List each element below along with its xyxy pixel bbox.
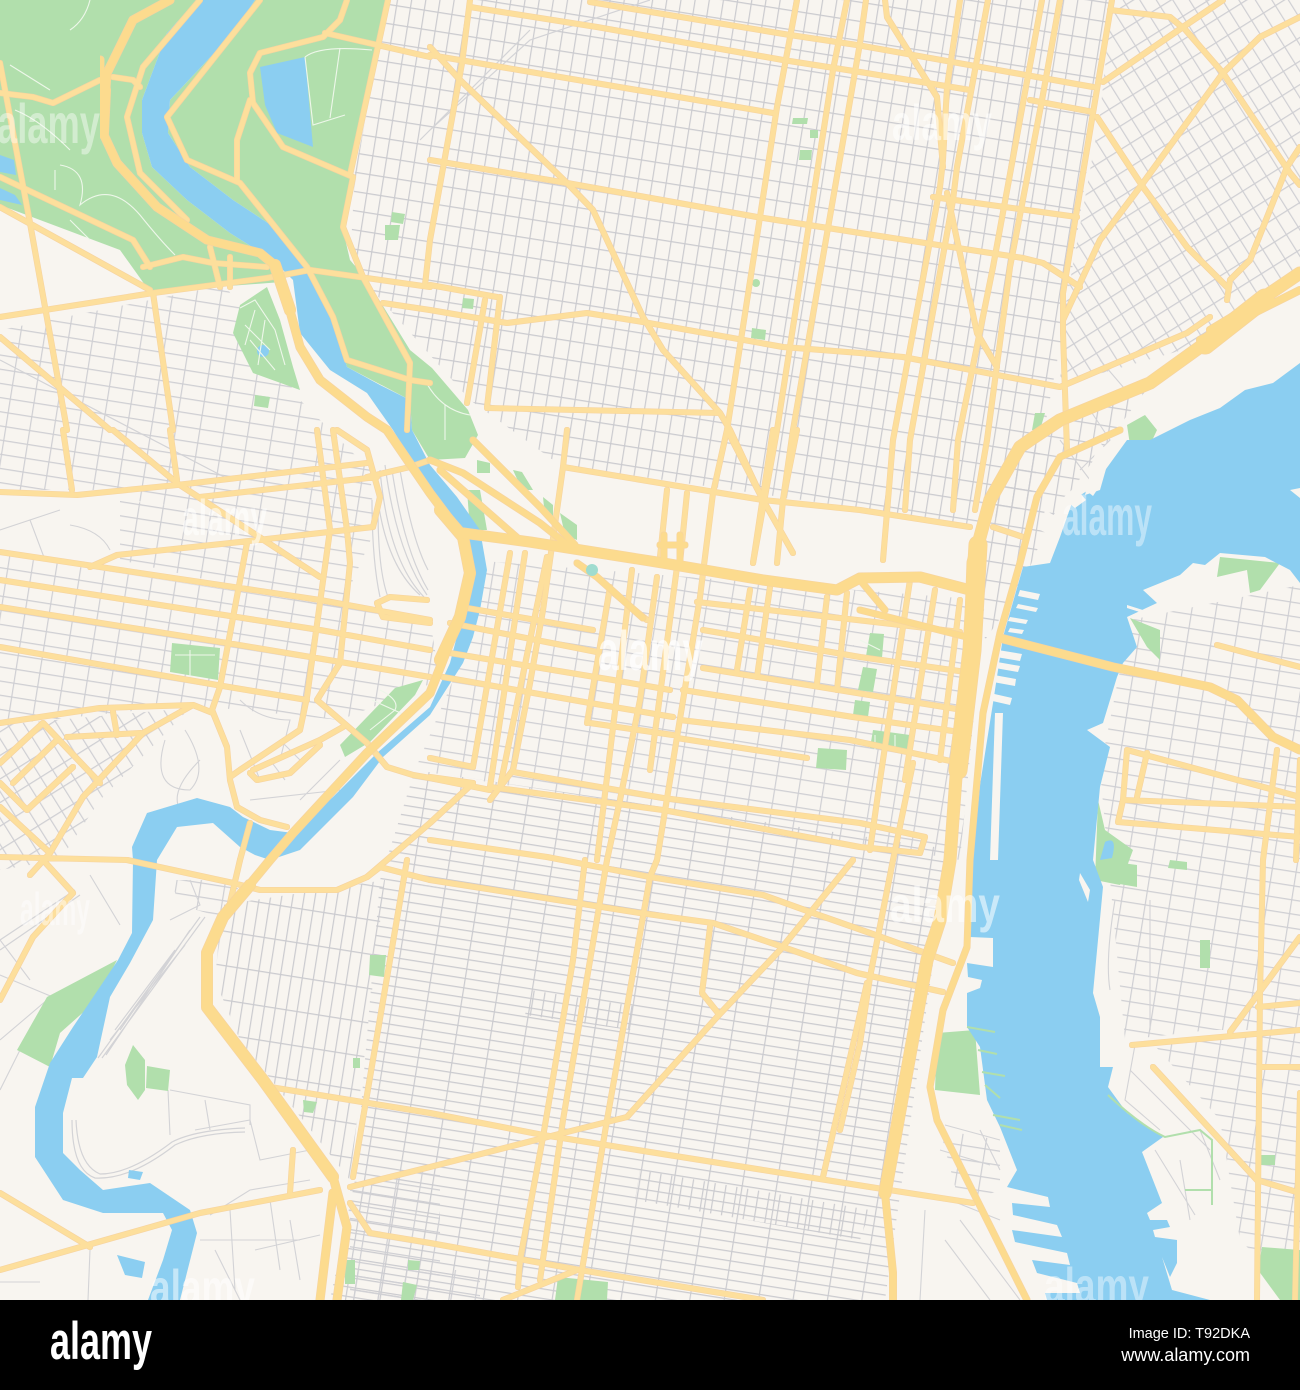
alamy logo: alamy [50,1312,152,1371]
watermarks: alamy [0,92,100,155]
watermarks: alamy [1044,1258,1149,1314]
Vine Street Expressway [463,533,970,590]
Schuylkill River [35,0,487,1300]
image id: Image ID: T92DKA [1129,1326,1250,1342]
piers and marinas [988,440,1300,902]
Delaware River [967,363,1300,1300]
waterfront greenery lines [967,1027,1212,1205]
main city streets [425,0,1210,1300]
watermarks: alamy [892,95,992,151]
rail yards [0,0,650,1178]
watermarks: alamy [1062,484,1152,547]
park paths [10,0,895,750]
Benjamin Franklin Bridge [1000,638,1300,750]
watermarks: alamy [20,883,90,935]
Schuylkill Expressway north [103,0,470,1300]
Delaware Avenue [930,430,1120,1300]
watermarks [0,92,1152,1316]
sparse local roads [0,360,1220,1300]
watermarks: alamy [890,877,1000,933]
Logan Circle [586,564,598,576]
footer bar [0,1300,1300,1390]
watermarks: alamy [598,619,703,682]
small lakes and reservoir [0,57,1114,1278]
watermarks: alamy [182,490,267,546]
watermarks: alamy [150,1260,255,1316]
Interstate 95 north [885,273,1300,1193]
website: www.alamy.com [1120,1345,1250,1365]
